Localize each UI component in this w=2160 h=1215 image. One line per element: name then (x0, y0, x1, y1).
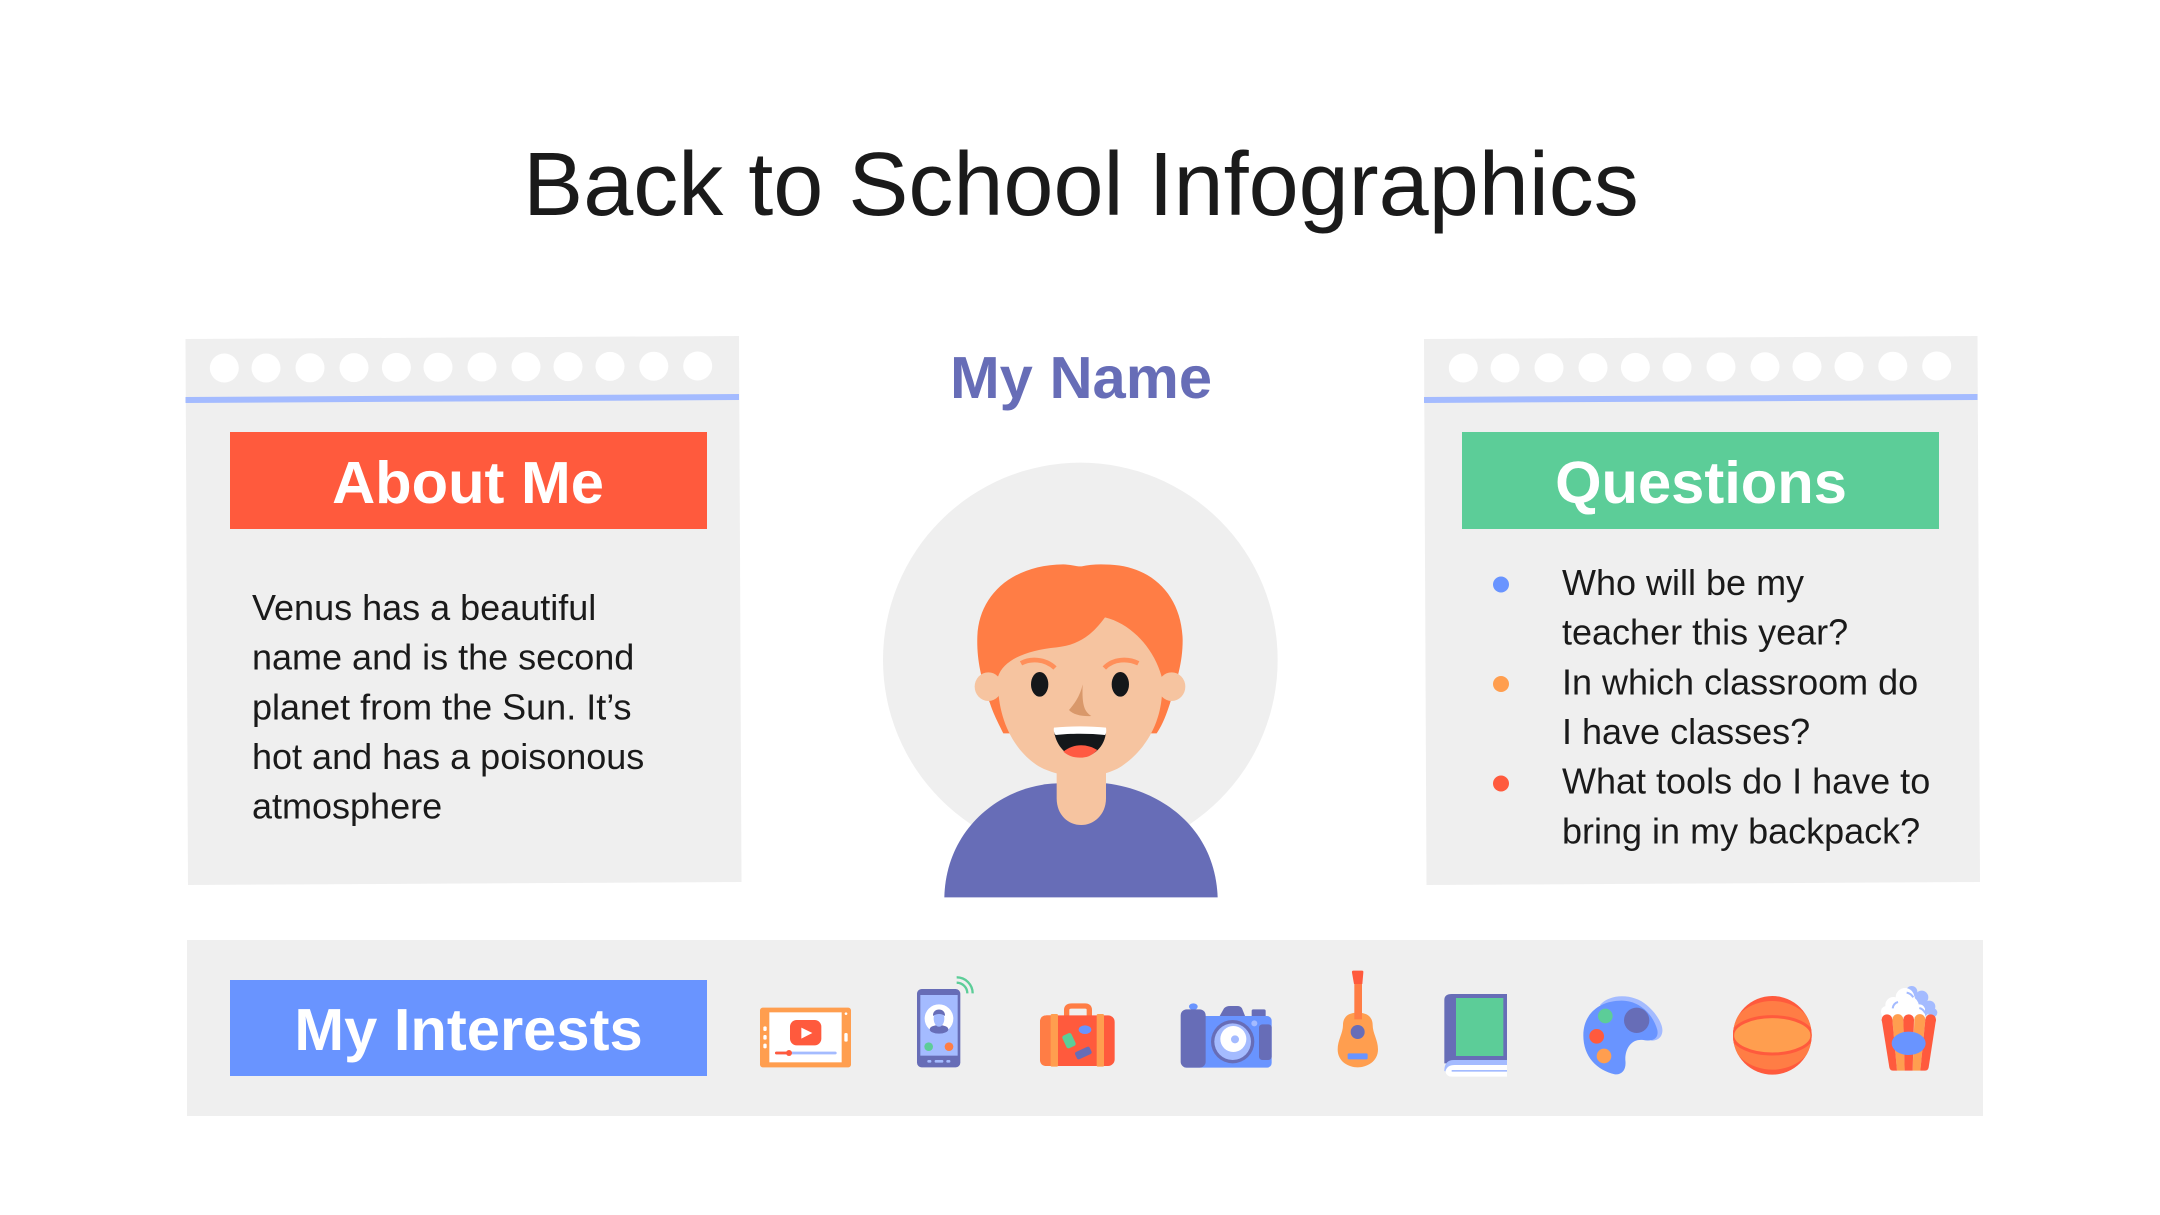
icon: guitar (1338, 971, 1378, 1067)
bullet list: questions: I have classes? (1562, 711, 1810, 752)
heading: about me (230, 432, 707, 529)
bullet list: questions (1493, 562, 1940, 851)
heading: my interests (230, 980, 707, 1076)
text block: about me: atmosphere (252, 786, 442, 827)
panel: my name (883, 344, 1278, 897)
heading: my name: My Name (950, 344, 1212, 411)
icon: popcorn (1881, 986, 1937, 1071)
icon: book (1444, 994, 1507, 1077)
icon: smartphone video call (917, 977, 973, 1067)
text block: about me: Venus has a beautiful (252, 587, 596, 628)
notebook paper: questions (1424, 336, 1980, 885)
heading: questions (1462, 432, 1939, 529)
bullet list: questions: teacher this year? (1562, 612, 1848, 653)
heading: questions: Questions (1555, 449, 1847, 516)
title: Back to School Infographics (523, 135, 1639, 235)
bullet list: questions: bring in my backpack? (1562, 810, 1920, 851)
bullet list: questions: What tools do I have to (1562, 761, 1930, 802)
heading: my interests: My Interests (294, 996, 643, 1063)
panel: questions (1424, 336, 1980, 885)
interests band (187, 940, 1983, 1116)
text block: about me: hot and has a poisonous (252, 736, 644, 777)
heading: about me: About Me (332, 449, 604, 516)
illustration: smiling boy avatar (883, 463, 1278, 897)
notebook paper: about me (185, 336, 741, 885)
text block: about me: name and is the second (252, 637, 634, 678)
text block: about me: planet from the Sun. It’s (252, 686, 632, 727)
icon: paint palette (1583, 996, 1662, 1074)
icon: camera (1181, 1003, 1272, 1068)
panel: my interests (187, 940, 1983, 1116)
icon: basketball (1731, 996, 1814, 1075)
bullet list: questions: Who will be my (1562, 562, 1804, 603)
icon: suitcase (1040, 1006, 1115, 1067)
bullet list: questions: In which classroom do (1562, 661, 1918, 702)
panel: about me (185, 336, 741, 885)
icon: video tablet (760, 1008, 851, 1067)
